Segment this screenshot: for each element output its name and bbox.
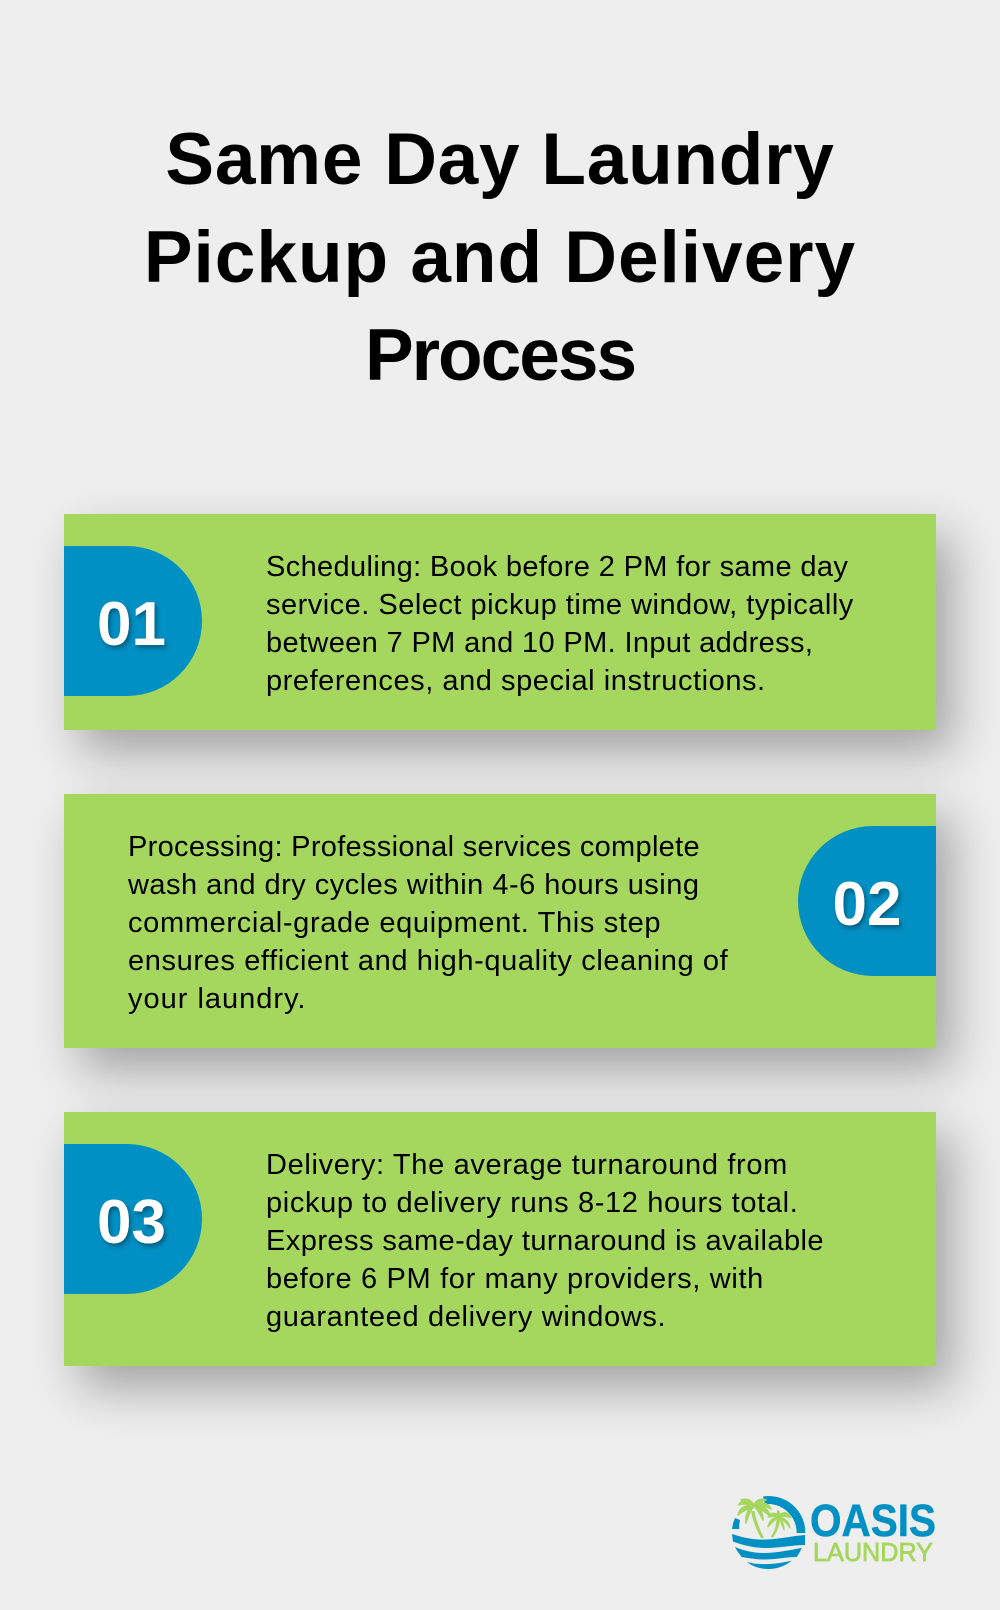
step 1 text: between 7 PM and 10 PM. Input address, — [266, 627, 813, 659]
step number 01 — [64, 546, 202, 696]
icon: palm trees and waves — [732, 1496, 805, 1569]
step 2 text: wash and dry cycles within 4-6 hours using — [128, 869, 699, 901]
step 3 text — [266, 1149, 824, 1333]
step 1 text: service. Select pickup time window, typically — [266, 589, 854, 621]
wordmark LAUNDRY: LAUNDRY — [813, 1537, 933, 1567]
step 2 text: your laundry. — [128, 983, 306, 1015]
title: Pickup and Delivery — [144, 217, 856, 298]
step 3 text: Delivery: The average turnaround from — [266, 1149, 788, 1181]
step 3 text: guaranteed delivery windows. — [266, 1301, 666, 1333]
panel: step 3 delivery — [64, 1112, 936, 1366]
step 3 text: pickup to delivery runs 8-12 hours total. — [266, 1187, 798, 1219]
step number 01: 01 — [97, 590, 166, 659]
panel: step 2 processing — [64, 794, 936, 1048]
step number 03: 03 — [97, 1188, 166, 1257]
logo: Oasis Laundry — [732, 1495, 936, 1569]
title — [144, 119, 856, 396]
title: Process — [365, 315, 635, 396]
step 2 text: ensures efficient and high-quality cleaning of — [128, 945, 728, 977]
panel: step 1 scheduling — [64, 514, 936, 730]
step number 02 — [798, 826, 936, 976]
step number 02: 02 — [833, 870, 901, 939]
title: Same Day Laundry — [165, 119, 835, 200]
step 3 text: before 6 PM for many providers, with — [266, 1263, 764, 1295]
step 2 text: commercial-grade equipment. This step — [128, 907, 661, 939]
step number 03 — [64, 1144, 202, 1294]
step 1 text: Scheduling: Book before 2 PM for same day — [266, 551, 848, 583]
step 3 text: Express same-day turnaround is available — [266, 1225, 824, 1257]
step 1 text — [266, 551, 854, 697]
step 2 text — [128, 831, 728, 1015]
step 2 text: Processing: Professional services complete — [128, 831, 700, 863]
step 1 text: preferences, and special instructions. — [266, 665, 766, 697]
